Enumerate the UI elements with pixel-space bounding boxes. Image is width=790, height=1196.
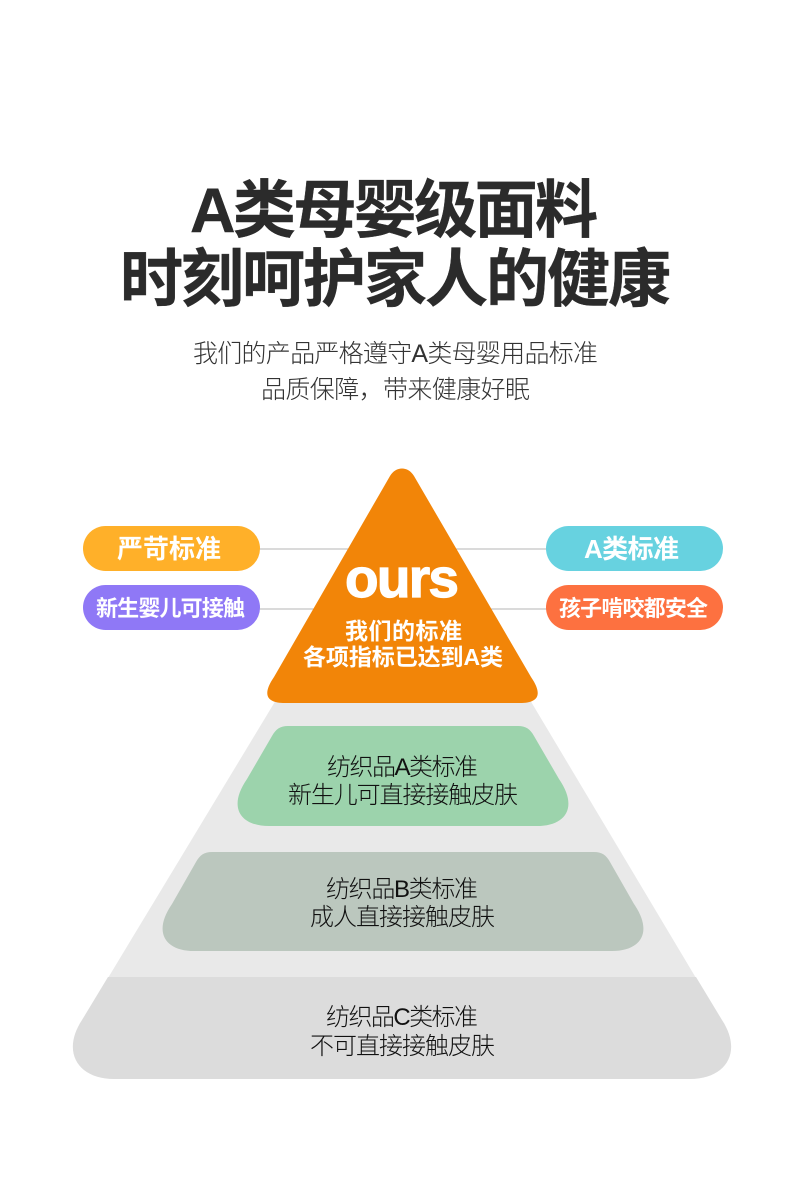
pyramid tier C	[73, 977, 731, 1079]
subtitle	[193, 340, 598, 404]
pyramid tier C: 纺织品C类标准	[326, 1004, 478, 1031]
subtitle: 品质保障，带来健康好眠	[261, 376, 530, 404]
pyramid tier A: 纺织品A类标准	[327, 754, 478, 781]
pill: strict standard: 严苛标准	[117, 534, 221, 564]
orange top triangle	[267, 468, 538, 703]
title: 时刻呵护家人的健康	[120, 245, 671, 315]
pyramid tier A	[238, 726, 568, 826]
pyramid tier B: 纺织品B类标准	[326, 876, 478, 903]
pyramid tier C: 不可直接接触皮肤	[310, 1033, 495, 1060]
pill: class A standard: A类标准	[584, 534, 679, 564]
pyramid tier B	[163, 852, 643, 951]
pill: class A standard	[546, 526, 723, 571]
connector lines	[255, 549, 550, 609]
pill: safe to bite	[546, 585, 723, 630]
pill: safe to bite: 孩子啃咬都安全	[559, 596, 708, 621]
pill: strict standard	[83, 526, 260, 571]
title: A类母婴级面料	[190, 176, 598, 246]
our standard text	[303, 618, 503, 670]
our standard text: 我们的标准	[345, 618, 462, 644]
brand logo text: ours	[345, 547, 459, 609]
pill: newborn contact: 新生婴儿可接触	[96, 596, 245, 621]
subtitle: 我们的产品严格遵守A类母婴用品标准	[193, 340, 598, 368]
title	[120, 176, 671, 315]
pyramid: light gray body	[108, 700, 696, 978]
our standard text: 各项指标已达到A类	[303, 644, 503, 670]
pyramid tier B: 成人直接接触皮肤	[310, 904, 495, 931]
pill: newborn contact	[83, 585, 260, 630]
pyramid tier A: 新生儿可直接接触皮肤	[288, 782, 518, 809]
